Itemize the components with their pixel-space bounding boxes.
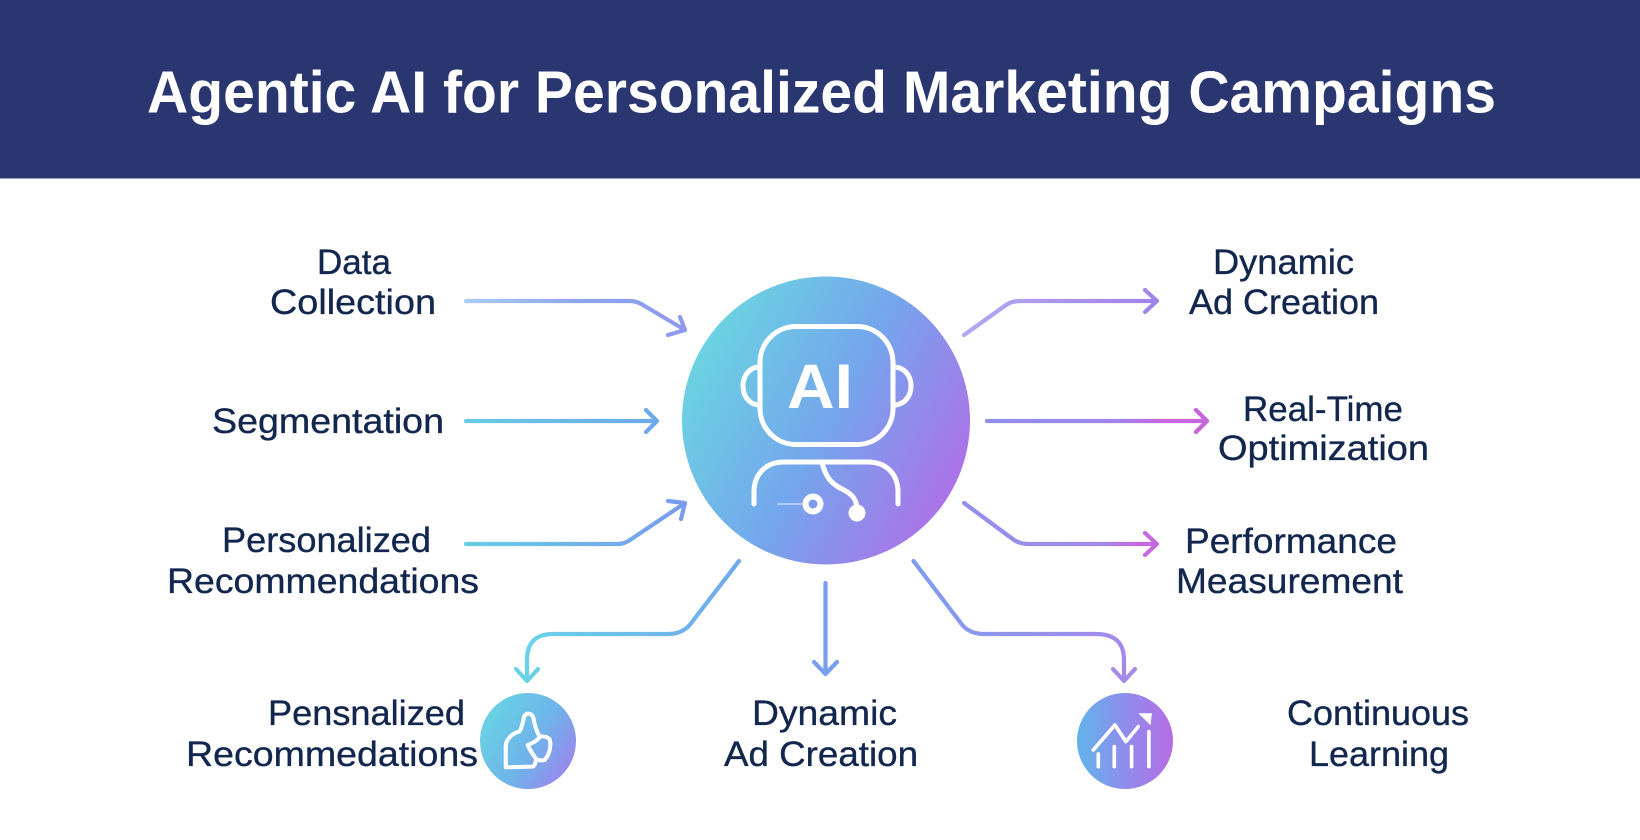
label: Continuous Learning — [1287, 694, 1469, 774]
arrow: AI to bottom dynamic ad creation — [814, 583, 837, 674]
arrow: data collection to AI — [466, 301, 685, 335]
label: Pensnalized Recommedations: Pensnalized — [268, 694, 465, 733]
AI text: AI — [787, 352, 853, 422]
faint line — [777, 503, 803, 505]
arrow: personalized recommendations to AI — [466, 501, 685, 544]
arrow: AI to real-time optimization — [987, 410, 1207, 432]
label: Real-Time Optimization — [1218, 390, 1429, 468]
label: Real-Time Optimization: Optimization — [1218, 429, 1429, 468]
label: Pensnalized Recommedations — [186, 694, 478, 774]
label: Continuous Learning: Continuous — [1287, 694, 1469, 733]
label: Personalized Recommendations: Personalized — [222, 521, 431, 560]
label: Dynamic Ad Creation (right) — [1189, 243, 1379, 322]
label: Dynamic Ad Creation (bottom): Dynamic — [752, 694, 897, 733]
label: Segmentation: Segmentation — [212, 402, 444, 441]
icon: growth chart — [1077, 693, 1173, 789]
label: Data Collection: Collection — [270, 283, 436, 322]
icon: thumbs up — [480, 693, 576, 789]
central AI robot icon — [682, 276, 970, 564]
label: Data Collection — [270, 243, 436, 322]
robot head — [760, 326, 893, 444]
arrow: AI to continuous learning icon — [914, 561, 1135, 681]
wire — [822, 463, 857, 510]
left ear — [743, 367, 758, 405]
right ear — [895, 367, 911, 405]
arrow: AI to dynamic ad creation — [964, 290, 1157, 335]
label: Personalized Recommendations — [167, 521, 479, 601]
label: Real-Time Optimization: Real-Time — [1243, 390, 1403, 429]
label: Dynamic Ad Creation (right): Ad Creation — [1189, 283, 1379, 322]
label: Dynamic Ad Creation (right): Dynamic — [1213, 243, 1354, 282]
label: Pensnalized Recommedations: Recommedations — [186, 735, 478, 774]
label: Dynamic Ad Creation (bottom) — [724, 694, 918, 774]
label: Performance Measurement — [1176, 522, 1403, 601]
header banner — [0, 0, 1640, 178]
wire end dot — [848, 504, 866, 522]
title: Agentic AI for Personalized Marketing Campaigns — [147, 60, 1496, 126]
target node — [806, 496, 820, 512]
label: Dynamic Ad Creation (bottom): Ad Creation — [724, 735, 918, 774]
gradient circle — [682, 276, 970, 564]
arrow: segmentation to AI — [466, 410, 657, 432]
label: Performance Measurement: Measurement — [1176, 562, 1403, 601]
label: Continuous Learning: Learning — [1309, 735, 1449, 774]
arrow: AI to bottom-left recommendations — [516, 561, 739, 681]
label: Data Collection: Data — [317, 243, 392, 282]
arrow: AI to performance measurement — [964, 503, 1157, 555]
label: Performance Measurement: Performance — [1185, 522, 1397, 561]
label: Personalized Recommendations: Recommendations — [167, 562, 479, 601]
robot body — [754, 462, 898, 504]
